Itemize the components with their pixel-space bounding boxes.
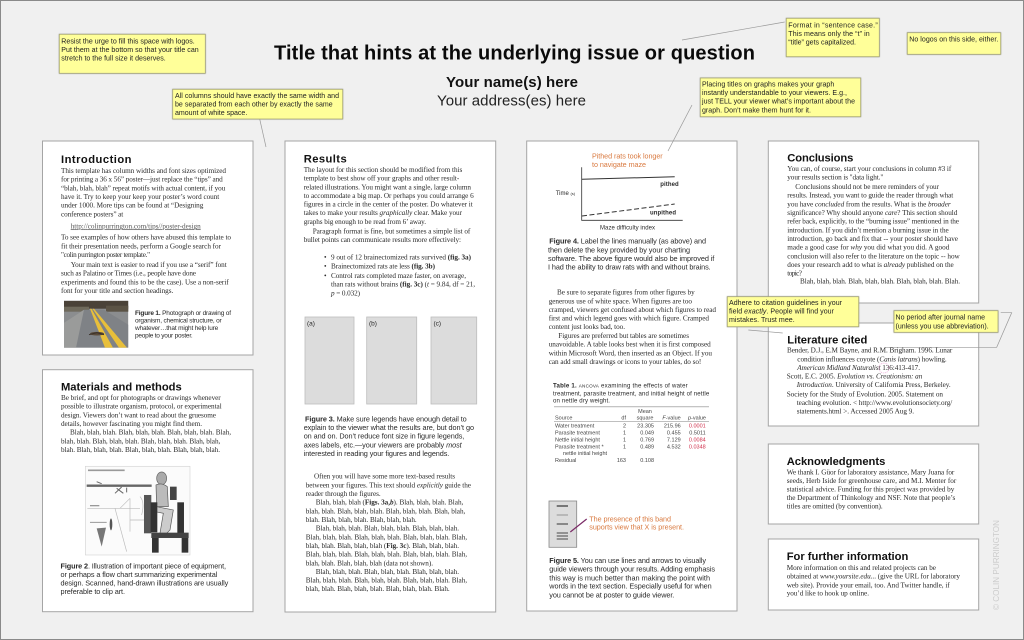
- caption: figure 3: Figure 3. Make sure legends have enough detail to: [305, 414, 467, 423]
- text block: results intro: bullet points can communicate results more effectively:: [304, 236, 461, 244]
- panel: results: [285, 141, 496, 612]
- text block: introduction: http://colinpurrington.com/tips//poster-design: [71, 222, 201, 230]
- arrow: band pointer: [570, 519, 587, 532]
- table 1: ANCOVA: 0.0084: [689, 438, 706, 444]
- callout: band annotation: suports view that X is present.: [589, 523, 684, 532]
- note: column widths: amount of white space.: [175, 110, 247, 117]
- caption: figure 5: words in the text section. Especially useful for when: [548, 582, 712, 591]
- text block: introduction: conference posters” at: [61, 210, 123, 218]
- bullet list: Brainectomized rats ate less (fig. 3b): [331, 263, 436, 271]
- text block: acknowledgments: seeds, Herb Iside for greenhouse care, and M.I. Menter for: [787, 477, 957, 485]
- figure 3: panel b placeholder: [367, 317, 417, 404]
- text block: materials: design. Viewers don’t want to read about the gruesome: [61, 411, 216, 419]
- table 1: ANCOVA: 1: [623, 431, 626, 437]
- heading: conclusions: Conclusions: [787, 152, 853, 164]
- text block: acknowledgments: [787, 468, 957, 511]
- text block: figures and tables advice: [549, 289, 716, 366]
- text block: references: [787, 347, 953, 416]
- text block: figures and tables advice: Figures are preferred but tables are sometimes: [558, 332, 689, 340]
- caption: figure 3: axes labels, etc.—your viewers are probably most: [304, 440, 463, 449]
- note: journal name period: No period after journal name: [896, 314, 985, 321]
- table 1: ANCOVA: 0.489: [640, 445, 654, 451]
- text block: results discussion: blah, blah. Blah, blah, blah (Fig. 3c). Blah, blah, blah.: [306, 542, 459, 550]
- text block: introduction: "colin purrington poster template.": [61, 251, 150, 259]
- panel: introduction: [42, 141, 253, 355]
- callout: band annotation: The presence of this band: [589, 515, 671, 524]
- caption: figure 1: Figure 1. Photograph or drawing of: [135, 310, 231, 317]
- note: logos left: [59, 34, 205, 73]
- caption: figure 5: guide viewers through your results. Adding emphasis: [549, 565, 715, 574]
- text block: results intro: figures in a circle in the center of the poster. Do whatever it: [304, 201, 473, 209]
- table 1: ANCOVA: 0.455: [667, 431, 681, 437]
- text block: results discussion: blah, blah. Blah, blah, blah. Blah, blah, blah. Blah, blah,: [306, 507, 466, 515]
- table caption: on nettle dry weight.: [553, 397, 610, 404]
- text block: materials: possible to illustrate organism, protocol, or experimental: [61, 403, 222, 411]
- note: journal name period: (unless you use abbreviation).: [896, 323, 989, 330]
- text block: figures and tables advice: Be sure to separate figures from other figures by: [557, 289, 695, 297]
- panel: materials and methods: [42, 370, 253, 612]
- note: logos right: [907, 33, 1001, 54]
- text block: further information: you’d like to hook up online.: [787, 590, 869, 598]
- heading: further information: For further information: [787, 551, 908, 563]
- bullet list: than rats without brains (fig. 3c) (t = 9.84, df = 21,: [331, 281, 475, 289]
- text block: results discussion: Often you will have some more text-based results: [314, 473, 455, 481]
- table 1: ANCOVA: 0.769: [640, 438, 654, 444]
- text block: introduction: experiments and found this to be the case). Use a non-serif: [61, 278, 229, 286]
- note: logos left: Put them at the bottom so that your title can: [61, 47, 199, 54]
- text block: references: Society for the Study of Evolution. 2005. Statement on: [787, 390, 943, 398]
- table 1: ANCOVA: Parasite treatment: [555, 431, 600, 437]
- caption: figure 1: whatever…that might help lure: [134, 325, 219, 332]
- table caption: treatment, parasite treatment, and initial height of nettle: [553, 390, 710, 397]
- highlight: missing period circle: [879, 363, 889, 373]
- text block: figures and tables advice: can add small drawings or icons to your tables, do so!: [549, 358, 701, 366]
- caption: figure 4: [548, 237, 715, 271]
- caption: figure 2: design. Scanned, hand-drawn illustrations are usually: [60, 579, 229, 588]
- text block: conclusions: [787, 165, 960, 286]
- bullet list: •: [324, 253, 327, 261]
- caption: figure 2: Figure 2. Illustration of important piece of equipment,: [60, 562, 226, 571]
- text block: figures and tables advice: unavoidable. A table looks best when it is first composed: [549, 341, 711, 349]
- heading: materials and methods: Materials and methods: [61, 382, 182, 394]
- text block: results intro: takes to make your results graphically clear. Make your: [304, 209, 463, 217]
- note: graph titles: just TELL your viewer what’s important about the: [701, 98, 855, 106]
- text block: materials: Be brief, and opt for photographs or drawings whenever: [61, 394, 221, 402]
- text block: results discussion: Blah, blah, blah. Blah, blah, blah. Blah, blah, blah.: [316, 568, 459, 576]
- text block: conclusions: your results section is "data light.": [787, 174, 883, 182]
- caption: figure 4: Figure 4. Label the lines manually (as above) and: [549, 237, 706, 246]
- text block: references: Scott, E.C. 2005. Evolution vs. Creationism: an: [787, 372, 923, 380]
- text block: figures and tables advice: generous use of white space. When figures are too: [549, 297, 692, 305]
- note: logos right: No logos on this side, either.: [909, 37, 998, 44]
- text block: results intro: The layout for this section should be modified from this: [304, 166, 462, 174]
- bullet list: •: [324, 263, 327, 271]
- note: column widths: [173, 89, 343, 147]
- copyright: © COLIN PURRINGTON: [992, 520, 1001, 610]
- text block: acknowledgments: We thank I. Güor for laboratory assistance, Mary Juana for: [787, 468, 955, 476]
- text block: results discussion: between your figures. This text should explicitly guide the: [306, 481, 471, 489]
- caption: figure 5: [548, 556, 715, 599]
- table 1: ANCOVA: p-value: [687, 416, 706, 422]
- table 1: ANCOVA: 0.5011: [689, 431, 706, 437]
- text block: results discussion: Blah, blah, blah. Blah, blah, blah. Blah, blah, blah.: [316, 525, 459, 533]
- chart title: Pithed rats took longer: [592, 152, 663, 161]
- text block: introduction: have it. Try to keep your keep your poster’s word count: [61, 193, 219, 201]
- text block: conclusions: topic?: [787, 270, 802, 278]
- bullet list: [324, 253, 475, 297]
- text block: references: American Midland Naturalist 136:413-417.: [796, 364, 920, 372]
- note: graph titles: instantly understandable to your viewers. E.g.,: [702, 90, 847, 97]
- caption: figure 4: then delete the key provided by your charting: [548, 245, 690, 254]
- text block: conclusions: You can, of course, start your conclusions in column #3 if: [787, 165, 952, 173]
- caption: figure 3: explain to the viewer what the results are, but don’t go: [304, 423, 474, 432]
- caption: figure 1: people to your poster.: [135, 332, 193, 340]
- text block: figures and tables advice: cramped, viewers get confused about which figures to read: [549, 306, 716, 314]
- text block: conclusions: does your research add to what is already published on the: [787, 261, 954, 269]
- text block: references: teaching evolution. < http://www.evolutionsociety.org/: [797, 399, 952, 407]
- panel: conclusions: [768, 141, 979, 303]
- table 1: ANCOVA: Mean: [638, 409, 652, 415]
- text block: results intro: graphs big enough to be read from 6’ away.: [304, 218, 426, 226]
- heading: acknowledgments: Acknowledgments: [787, 456, 885, 468]
- bullet list: p = 0.032): [330, 289, 361, 297]
- text block: introduction: fit their presentation needs, perform a Google search for: [61, 242, 222, 250]
- figure 4: line chart: pithed: [660, 182, 679, 188]
- caption: figure 5: you cannot be at poster to guide viewer.: [549, 590, 674, 599]
- note: citation guidelines: mistakes. Trust mee.: [729, 317, 795, 324]
- caption: figure 2: preferable to clip art.: [60, 587, 125, 596]
- panel: literature cited: [768, 323, 979, 426]
- note: sentence case: “title” gets capitalized.: [788, 40, 856, 46]
- text block: introduction: This template has column widths and font sizes optimized: [61, 167, 226, 175]
- bullet list: Control rats completed maze faster, on average,: [331, 272, 466, 280]
- bullet list: •: [324, 272, 327, 280]
- text block: introduction: Your main text is easier to read if you use a “serif” font: [71, 261, 227, 269]
- note: graph titles: [668, 78, 861, 151]
- text block: further information: More information on this and related projects can be: [787, 564, 936, 572]
- text block: introduction: To see examples of how others have abused this template to: [61, 234, 231, 242]
- note: graph titles: Placing titles on graphs makes your graph: [702, 81, 834, 88]
- panel: acknowledgments: [768, 444, 979, 524]
- caption: figure 3: interested in reading your figures and legends.: [304, 449, 449, 458]
- text block: conclusions: refer back, explicitly, to the “burning issue” mentioned in the: [787, 218, 959, 226]
- caption: figure 4: software. The above figure would also be improved if: [548, 254, 715, 263]
- text block: materials: blah, blah. Blah, blah, blah. Blah, blah, blah. Blah, blah,: [61, 437, 221, 445]
- text block: conclusions: conclusion will also refer to the literature on the topic -- how: [787, 252, 960, 260]
- text block: references: condition influences coyote (Canis latrans) howling.: [797, 355, 947, 363]
- photo: road with rat: [64, 300, 128, 348]
- table 1: ANCOVA: 7.129: [667, 438, 681, 444]
- text block: acknowledgments: titles are omitted (by convention).: [787, 503, 883, 511]
- figure 3: panel a placeholder: (a): [307, 321, 315, 328]
- text block: conclusions: significance? Why should anyone care? This section should: [787, 209, 958, 217]
- text block: results discussion: blah, blah. Blah, blah, blah. Blah, blah, blah. Blah.: [306, 585, 450, 593]
- table 1: ANCOVA: Water treatment: [555, 424, 595, 430]
- text block: results discussion: Blah, blah, blah (Figs. 3a,b). Blah, blah, blah. Blah,: [316, 499, 464, 507]
- table 1: ANCOVA: [553, 383, 710, 464]
- text block: results intro: template to best show off your graphs and other result-: [304, 175, 460, 183]
- text block: results intro: related illustrations. You might want a single, large column: [304, 183, 471, 191]
- caption: figure 2: or perhaps a flow chart summarizing experimental: [60, 570, 218, 579]
- text block: conclusions: you have concluded from the results. What is the broader: [787, 200, 951, 208]
- callout: band annotation: [589, 515, 684, 532]
- text block: references: Introduction. University of California Press, Berkeley.: [796, 381, 951, 389]
- heading: literature cited: Literature cited: [787, 334, 867, 346]
- table 1: ANCOVA: 2: [623, 424, 626, 430]
- table 1: ANCOVA: nettle initial height: [563, 451, 608, 457]
- note: column widths: be separated from each other by exactly the same: [175, 102, 333, 108]
- text block: results intro: [304, 166, 474, 244]
- text block: introduction: [61, 167, 231, 295]
- address: Your address(es) here: [437, 92, 586, 110]
- authors: Your name(s) here: [446, 74, 578, 91]
- caption: figure 5: this way is much better than making the point with: [549, 573, 710, 582]
- table 1: ANCOVA: 1: [623, 438, 626, 444]
- text block: results discussion: blah, blah. Blah, blah, blah (data not shown).: [306, 559, 433, 567]
- note: sentence case: This means only the “t” in: [788, 31, 870, 38]
- text block: introduction: “blah, blah, blah” repeat motifs with actual content, if you: [61, 184, 226, 192]
- text block: further information: [787, 564, 960, 598]
- table 1: ANCOVA: 0.108: [640, 458, 654, 464]
- caption: figure 4: I had the ability to draw rats with and without brains.: [548, 262, 711, 271]
- figure 5: gel image: [549, 501, 577, 547]
- figure 3: panel b placeholder: (b): [369, 321, 377, 328]
- text block: introduction: under 1000. More tips can be found at “Designing: [61, 202, 204, 210]
- text block: acknowledgments: statistical advice. Funding for this project was provided by: [787, 486, 955, 494]
- text block: results discussion: Blah, blah, blah. Blah, blah, blah. Blah, blah, blah. Blah,: [306, 577, 467, 585]
- text block: introduction: such as Palatino or Times (i.e., people have done: [61, 270, 196, 278]
- text block: conclusions: Blah, blah, blah. Blah, blah, blah. Blah, blah, blah. Blah.: [800, 278, 960, 286]
- text block: further information: obtained at www.yoursite.edu... (give the URL for laboratory: [787, 573, 960, 581]
- text block: conclusions: introduction, go back and fix that -- your poster should have: [787, 235, 958, 243]
- figure 4: line chart: unpithed: [650, 210, 676, 216]
- table 1: ANCOVA: df: [621, 416, 626, 422]
- note: sentence case: Format in “sentence case.”: [788, 22, 878, 29]
- figure 2: engraving of seated figure: [85, 466, 190, 555]
- text block: materials: Blah, blah, blah. Blah, blah, blah. Blah, blah, blah. Blah,: [70, 429, 231, 437]
- heading: introduction: Introduction: [61, 154, 132, 166]
- heading: results: Results: [304, 153, 347, 165]
- note: citation guidelines: field exactly. People will find your: [729, 309, 835, 316]
- table 1: ANCOVA: 1: [623, 445, 626, 451]
- note: citation guidelines: Adhere to citation guidelines in your: [729, 300, 843, 307]
- table 1: ANCOVA: 215.96: [664, 424, 681, 430]
- caption: figure 1: [134, 310, 231, 340]
- table 1: ANCOVA: 0.0001: [689, 424, 706, 430]
- figure 4: line chart: Time (s): [556, 191, 576, 197]
- table 1: ANCOVA: 163: [617, 458, 626, 464]
- figure 4: line chart: Maze difficulty index: [600, 225, 655, 231]
- text block: references: statements.html >. Accessed 2005 Aug 9.: [797, 408, 914, 416]
- note: logos left: Resist the urge to fill this space with logos.: [61, 38, 195, 46]
- note: citation guidelines: [727, 297, 859, 333]
- title: Title that hints at the underlying issue or question: [274, 42, 755, 64]
- figure 3: panel a placeholder: [305, 317, 354, 404]
- text block: materials: details, however fascinating you might find them.: [61, 420, 202, 428]
- text block: figures and tables advice: content just looks bad, too.: [549, 323, 625, 331]
- text block: results intro: Paragraph format is fine, but sometimes a simple list of: [313, 227, 471, 235]
- text block: introduction: for printing a 36 x 56” poster—just replace the “tips” and: [61, 176, 223, 184]
- figure 3: panel c placeholder: [431, 317, 477, 404]
- text block: results discussion: blah. Blah, blah, blah. Blah, blah, blah.: [306, 516, 417, 524]
- figure 4: line chart: [556, 152, 683, 231]
- chart title: to navigate maze: [592, 160, 646, 169]
- text block: conclusions: made a good case for why you did what you did. A good: [787, 244, 950, 252]
- note: sentence case: [682, 18, 879, 57]
- text block: materials: [61, 394, 231, 454]
- text block: references: Bender, D.J., E.M Bayne, and R.M. Brigham. 1996. Lunar: [787, 347, 953, 355]
- text block: results discussion: reader through the figures.: [306, 490, 381, 498]
- caption: figure 3: on and on. Don’t reduce font size in figure legends,: [304, 432, 464, 441]
- caption: figure 3: [304, 414, 474, 458]
- text block: results intro: to accommodate a big map. Or perhaps you could arrange 6: [304, 192, 474, 200]
- note: logos left: stretch to the full size it deserves.: [61, 55, 166, 62]
- text block: acknowledgments: the Department of Thinkology and NSF. Note that people’s: [787, 494, 955, 502]
- table 1: ANCOVA: 4.532: [667, 445, 681, 451]
- table 1: ANCOVA: 0.0348: [689, 445, 706, 451]
- caption: figure 2: [60, 562, 229, 596]
- panel: results continued: [527, 141, 737, 611]
- table 1: ANCOVA: Nettle initial height: [555, 438, 600, 444]
- note: journal name period: [885, 311, 1012, 347]
- table 1: ANCOVA: F-value: [662, 416, 681, 422]
- panel: for further information: [768, 539, 979, 610]
- text block: conclusions: results. Instead, you want to guide the reader through what: [787, 192, 953, 200]
- table 1: ANCOVA: Residual: [555, 458, 576, 464]
- table caption: [553, 383, 710, 404]
- note: column widths: All columns should have exactly the same width and: [175, 93, 339, 100]
- text block: further information: web site). Provide your email, too. And Twitter handle, if: [787, 581, 950, 589]
- table 1: ANCOVA: square: [637, 416, 653, 422]
- text block: figures and tables advice: first and which legend goes with which figure. Cramped: [549, 314, 709, 322]
- text block: conclusions: Conclusions should not be mere reminders of your: [795, 183, 940, 191]
- table 1: ANCOVA: Source: [555, 416, 572, 422]
- table caption: Table 1. ANCOVA examining the effects of water: [553, 383, 688, 390]
- table 1: ANCOVA: Parasite treatment *: [555, 445, 604, 451]
- text block: figures and tables advice: within Microsoft Word, then inserted as an Object. If you: [549, 349, 712, 357]
- note: graph titles: graph. Don’t make them hunt for it.: [702, 108, 811, 114]
- figure 3: panel c placeholder: (c): [434, 321, 441, 328]
- text block: materials: blah. Blah, blah, blah. Blah, blah, blah. Blah, blah, blah.: [61, 446, 220, 454]
- bullet list: 9 out of 12 brainectomized rats survived (fig. 3a): [331, 253, 472, 261]
- table 1: ANCOVA: 0.049: [640, 431, 654, 437]
- text block: results discussion: [306, 473, 471, 593]
- caption: figure 1: organism, chemical structure, or: [135, 318, 223, 324]
- text block: results discussion: Blah, blah, blah. Blah, blah, blah. Blah, blah, blah. Blah,: [306, 533, 467, 541]
- text block: introduction: font for your title and section headings.: [61, 287, 174, 295]
- text block: results discussion: Blah, blah, blah. Blah, blah, blah. Blah, blah, blah. Blah,: [306, 551, 467, 559]
- text block: conclusions: introduction. If you didn’t mention a burning issue in the: [787, 226, 949, 234]
- chart title: [592, 152, 663, 169]
- table 1: ANCOVA: 23.305: [637, 424, 654, 430]
- caption: figure 5: Figure 5. You can use lines and arrows to visually: [549, 556, 706, 565]
